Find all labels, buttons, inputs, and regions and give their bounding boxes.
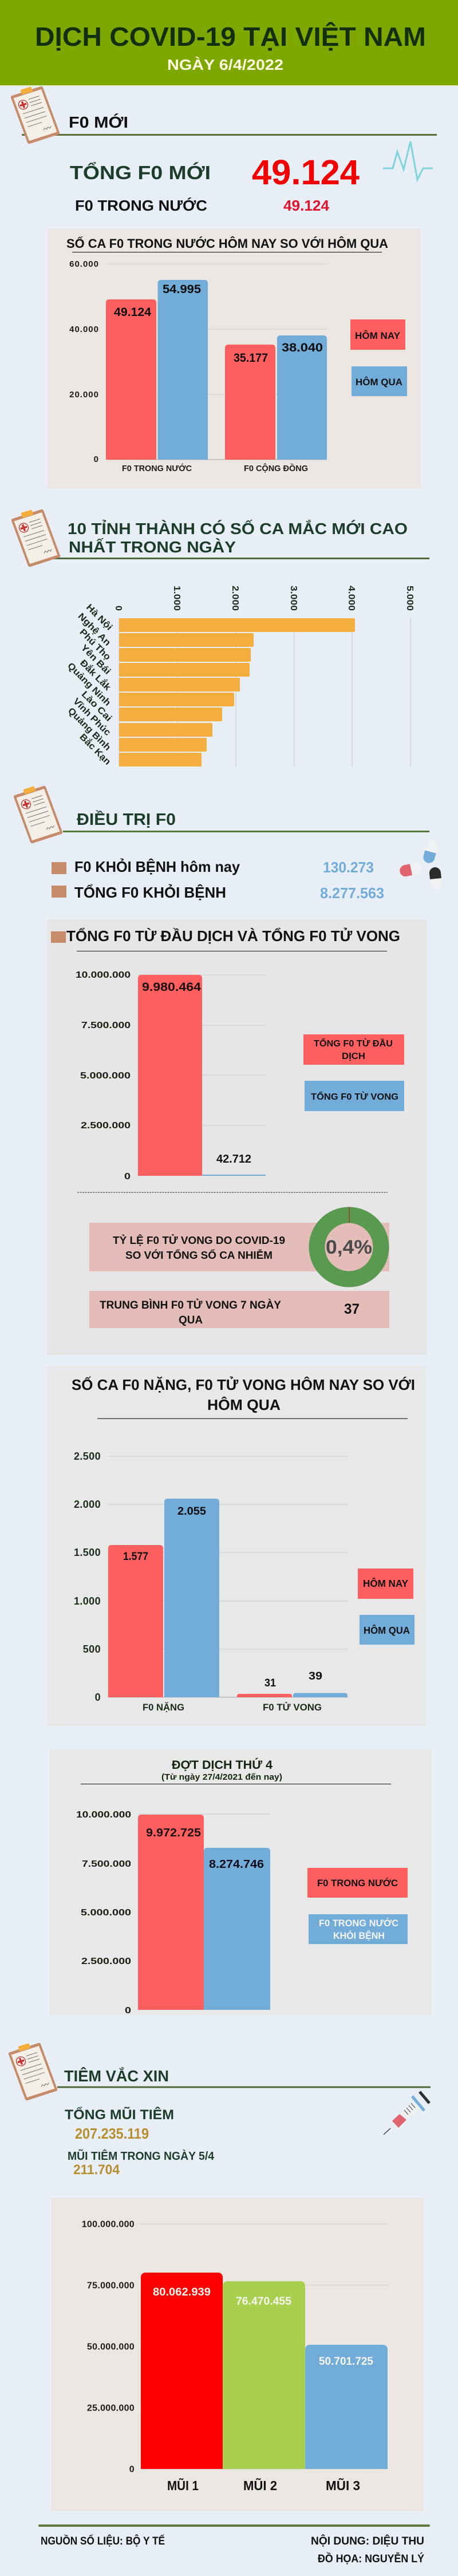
value: mũi tiêm trong ngày: 211.704	[73, 2162, 120, 2178]
label: tổng mũi tiêm: TỔNG MŨI TIÊM	[65, 2107, 174, 2123]
heading: ĐIỀU TRỊ F0	[77, 809, 176, 829]
chart title: TỔNG F0 TỪ ĐẦU DỊCH VÀ TỔNG F0 TỬ VONG	[66, 927, 400, 945]
axis labels: 1.500	[74, 1547, 101, 1558]
category labels: MŨI 1	[167, 2478, 199, 2493]
province labels: Nghệ An	[76, 611, 112, 648]
legend: HÔM NAY	[355, 330, 401, 341]
icon: pills	[398, 839, 443, 891]
value: tổng mũi tiêm: 207.235.119	[75, 2125, 149, 2142]
bar chart	[74, 1451, 348, 1713]
bar values: 35.177	[234, 351, 268, 365]
stat: tổng F0 khỏi bệnh: TỔNG F0 KHỎI BỆNH	[74, 883, 226, 901]
callout: tỷ lệ F0 tử vong: SO VỚI TỔNG SỐ CA NHIỄM	[125, 1249, 273, 1261]
category labels: F0 TỬ VONG	[263, 1702, 322, 1713]
category labels: F0 CỘNG ĐỒNG	[244, 463, 308, 473]
bar chart	[76, 970, 266, 1182]
axis values	[113, 586, 414, 611]
bar chart	[69, 259, 327, 473]
axis values: 2.000	[230, 586, 240, 611]
legend	[350, 319, 407, 396]
source credit: NGUỒN SỐ LIỆU: BỘ Y TẾ	[41, 2535, 165, 2547]
bar values: 39	[309, 1670, 322, 1682]
legend: KHỎI BỆNH	[333, 1930, 385, 1941]
value: F0 trong nước: 49.124	[283, 197, 330, 214]
heading: 10 TỈNH THÀNH CÓ SỐ CA MẮC MỚI CAO	[68, 519, 408, 538]
heading: TIÊM VẮC XIN	[64, 2067, 169, 2085]
section: tiêm vắc xin	[7, 2040, 431, 2178]
bar values: 50.701.725	[319, 2355, 373, 2368]
category labels: MŨI 2	[243, 2478, 277, 2493]
axis labels	[76, 970, 131, 1182]
axis labels: 0	[125, 2006, 131, 2016]
axis values: 0	[113, 606, 123, 611]
stat: F0 khỏi bệnh hôm nay	[52, 858, 374, 876]
bar values	[153, 2286, 373, 2368]
panel: đợt dịch thứ 4	[49, 1749, 432, 2016]
legend: TỔNG F0 TỪ ĐẦU	[314, 1038, 393, 1049]
axis labels: 5.000.000	[80, 1071, 131, 1081]
bars	[108, 1499, 348, 1697]
callout: tỷ lệ F0 tử vong	[89, 1207, 389, 1279]
axis labels: 20.000	[69, 390, 99, 400]
bar values: 76.470.455	[236, 2295, 291, 2308]
bars	[138, 975, 202, 1176]
heading: NHẤT TRONG NGÀY	[69, 538, 236, 556]
bar chart: 8.274.746	[209, 1858, 264, 1871]
panel: F0 trong nước hôm nay so với hôm qua	[48, 228, 421, 488]
horizontal bar chart: provinces	[65, 586, 414, 767]
graphics credit: ĐỒ HỌA: NGUYỄN LÝ	[318, 2553, 424, 2565]
legend: HÔM NAY	[363, 1577, 408, 1589]
bar values: 31	[264, 1677, 276, 1689]
axis labels: 50.000.000	[87, 2342, 135, 2352]
axis labels: 5.000.000	[81, 1908, 131, 1918]
bars	[141, 2273, 388, 2469]
axis labels: 0	[124, 1172, 131, 1182]
axis values: 4.000	[346, 586, 356, 611]
legend: TỔNG F0 TỪ VONG	[311, 1092, 398, 1102]
callout: trung bình F0 tử vong: 37	[344, 1301, 360, 1317]
bar values: 1.577	[123, 1551, 148, 1563]
axis labels: 25.000.000	[87, 2403, 135, 2413]
bars	[138, 1815, 204, 2010]
content credit: NỘI DUNG: DIỆU THU	[311, 2535, 424, 2547]
province labels: Đắk Lắk	[78, 657, 113, 693]
donut chart	[317, 1207, 381, 1279]
axis labels: 2.500.000	[81, 1121, 131, 1131]
section: 10 tỉnh thành	[10, 506, 429, 567]
category labels: F0 NẶNG	[143, 1702, 184, 1713]
province labels: Quảng Bình	[66, 706, 112, 753]
bar values	[123, 1506, 322, 1689]
bar values: 9.972.725	[146, 1826, 201, 1839]
axis labels: 7.500.000	[81, 1021, 131, 1030]
panel: mũi tiêm bar chart	[51, 2198, 424, 2511]
bar chart: 42.712	[216, 1153, 251, 1165]
date subtitle: NGÀY 6/4/2022	[167, 56, 283, 73]
legend	[358, 1568, 414, 1645]
axis values: 5.000	[405, 586, 414, 611]
axis labels: 0	[129, 2465, 135, 2474]
label: tổng F0 mới: TỔNG F0 MỚI	[70, 162, 211, 183]
legend: HÔM QUA	[356, 377, 402, 388]
bar values	[114, 283, 323, 365]
label: mũi tiêm trong ngày: MŨI TIÊM TRONG NGÀY 5/4	[68, 2149, 215, 2163]
axis labels: 10.000.000	[76, 970, 131, 980]
axis labels	[69, 259, 99, 464]
axis labels: 7.500.000	[82, 1859, 131, 1869]
axis labels: 2.000	[74, 1499, 101, 1510]
bar values: 9.980.464	[142, 981, 201, 994]
axis labels: 0	[94, 455, 99, 464]
axis labels	[74, 1451, 101, 1703]
label: F0 trong nước: F0 TRONG NƯỚC	[75, 197, 207, 214]
axis labels	[82, 2220, 135, 2474]
value: tổng F0 mới: 49.124	[252, 153, 360, 192]
donut chart: 0,4%	[326, 1236, 372, 1258]
legend	[303, 1034, 404, 1111]
axis values: 1.000	[172, 586, 181, 611]
chart title	[72, 1376, 415, 1413]
icon: clipboard	[10, 506, 61, 567]
legend: HÔM QUA	[364, 1624, 410, 1636]
category labels	[167, 2478, 360, 2493]
bar values: 80.062.939	[153, 2286, 211, 2298]
panel: F0 nặng, F0 tử vong	[47, 1366, 426, 1726]
chart subtitle: (Từ ngày 27/4/2021 đến nay)	[161, 1772, 282, 1782]
axis labels: 2.500	[74, 1451, 101, 1462]
axis labels: 0	[95, 1692, 101, 1703]
category labels	[143, 1702, 322, 1713]
category labels	[122, 463, 308, 473]
province labels: Yên Bái	[79, 643, 112, 677]
legend: DỊCH	[342, 1052, 365, 1061]
axis labels: 100.000.000	[82, 2220, 135, 2229]
icon: syringe	[384, 2092, 429, 2135]
axis labels: 75.000.000	[87, 2281, 135, 2291]
bar values: 38.040	[282, 341, 323, 354]
axis labels: 500	[83, 1643, 101, 1655]
axis labels: 40.000	[69, 325, 99, 334]
axis labels	[76, 1810, 131, 2016]
province labels: Hà Nội	[84, 602, 114, 633]
stat: tổng F0 khỏi bệnh: 8.277.563	[320, 884, 384, 902]
axis values: 3.000	[289, 586, 298, 611]
axis labels: 10.000.000	[76, 1810, 131, 1820]
callout: trung bình F0 tử vong: QUA	[179, 1314, 203, 1326]
icon: clipboard	[7, 2040, 58, 2101]
section: điều trị F0	[12, 783, 443, 902]
chart title: HÔM QUA	[207, 1396, 281, 1413]
bar values: 54.995	[163, 283, 201, 296]
bar values: 2.055	[177, 1506, 206, 1518]
stat: F0 khỏi bệnh hôm nay: F0 KHỎI BỆNH hôm nay	[74, 858, 240, 875]
heading	[68, 519, 408, 556]
province labels: Lào Cai	[80, 689, 113, 724]
axis labels: 1.000	[74, 1595, 101, 1607]
icon: heartbeat pulse	[383, 141, 433, 180]
category labels: F0 TRONG NƯỚC	[122, 463, 192, 473]
category labels: MŨI 3	[326, 2478, 360, 2493]
chart title: SỐ CA F0 NẶNG, F0 TỬ VONG HÔM NAY SO VỚI	[72, 1376, 415, 1393]
chart title: SỐ CA F0 TRONG NƯỚC HÔM NAY SO VỚI HÔM QUA	[66, 236, 388, 251]
province labels: Vĩnh Phúc	[71, 697, 112, 738]
section: F0 mới	[9, 83, 437, 214]
bar values: 49.124	[114, 306, 151, 319]
bars	[106, 280, 327, 460]
province labels	[65, 602, 114, 767]
chart title: ĐỢT DỊCH THỨ 4	[172, 1758, 273, 1772]
stat: F0 khỏi bệnh hôm nay: 130.273	[323, 859, 374, 876]
stat: tổng F0 khỏi bệnh	[52, 883, 384, 902]
header banner	[0, 0, 458, 86]
axis labels: 2.500.000	[81, 1957, 131, 1966]
icon: clipboard	[12, 783, 63, 844]
heading: F0 mới: F0 MỚI	[69, 113, 128, 131]
province labels: Phú Thọ	[77, 627, 112, 662]
callout: trung bình F0 tử vong: TRUNG BÌNH F0 TỬ VONG 7 NGÀY	[100, 1299, 281, 1311]
callout: trung bình F0 tử vong	[89, 1291, 389, 1328]
legend: F0 TRONG NƯỚC	[317, 1878, 398, 1888]
province labels: Bắc Kạn	[77, 732, 113, 767]
province labels: Quảng Ninh	[65, 661, 112, 708]
bar chart	[76, 1810, 270, 2016]
footer	[38, 2524, 430, 2565]
axis labels: 60.000	[69, 259, 99, 269]
panel: tổng F0 từ đầu dịch và tổng F0 tử vong	[47, 919, 427, 1355]
icon: clipboard	[9, 83, 60, 144]
legend	[307, 1868, 408, 1944]
callout: tỷ lệ F0 tử vong: TỶ LỆ F0 TỬ VONG DO COVID-19	[113, 1234, 285, 1246]
bars	[119, 618, 355, 767]
legend: F0 TRONG NƯỚC	[319, 1918, 398, 1929]
title: DỊCH COVID-19 TẠI VIỆT NAM	[35, 22, 426, 52]
